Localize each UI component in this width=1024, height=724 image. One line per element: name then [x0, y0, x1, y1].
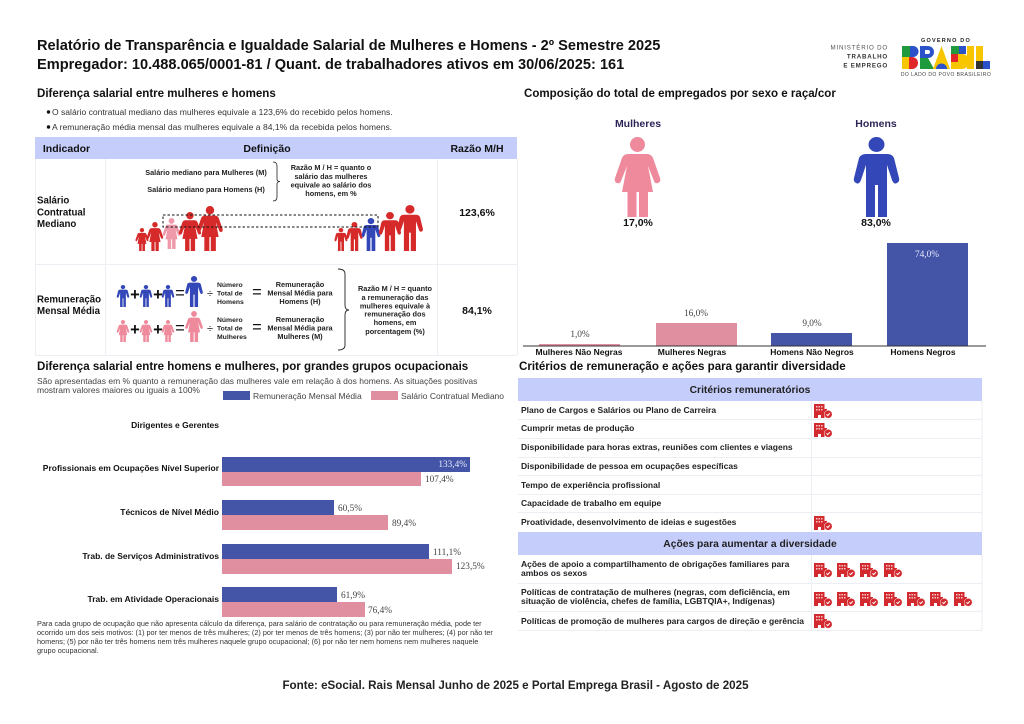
- title: [37, 38, 660, 73]
- definition: salário mediano labels: [145, 162, 280, 201]
- bar chart: composition: [523, 243, 986, 357]
- formula: men: [117, 276, 334, 307]
- panel: men total: 83,0%: [861, 217, 892, 229]
- bar chart: composition: 9,0%: [802, 319, 822, 329]
- bar chart: occupational groups: Profissionais em Ocupações Nível Superior: [43, 463, 220, 473]
- footnote: ocorrido um dos seis motivos: (1) por ter menos de três mulheres; (2) por ter menos de três homens; (3) por não ter mulheres; (4) por não ter: [37, 628, 493, 637]
- row label: salário contratual mediano: Contratual: [37, 208, 85, 218]
- bar chart: occupational groups: 123,5%: [456, 562, 485, 572]
- bar chart: occupational groups: Trab. em Atividade Operacionais: [88, 594, 219, 604]
- formula: women: Mulheres (M): [277, 332, 323, 341]
- criteria rows: Disponibilidade para horas extras, reuniões com clientes e viagens: [521, 442, 793, 452]
- bar chart: occupational groups: [43, 420, 485, 617]
- brace and razão text: Razão M / H = quanto: [358, 284, 433, 293]
- heading: diferença por grupos: Diferença salarial entre homens e mulheres, por grandes grupos ocupacionais: [37, 361, 468, 373]
- action rows: ambos os sexos: [521, 568, 587, 578]
- formula: men: Total de: [217, 290, 243, 298]
- formula: men: +: [153, 286, 163, 304]
- formula: women: =: [175, 320, 185, 338]
- footnote: Para cada grupo de ocupação que não apresenta cálculo da diferença, para salário de contratação ou para remuneração média, pode ter: [37, 619, 482, 628]
- formula: women: Total de: [217, 326, 243, 332]
- title: Empregador: 10.488.065/0001-81 / Quant. de trabalhadores ativos em 30/06/2025: 161: [37, 57, 624, 73]
- logo: ministério: E EMPREGO: [843, 62, 888, 70]
- bar chart: composition: 74,0%: [915, 250, 939, 260]
- formula: men: Homens (H): [279, 297, 321, 306]
- criteria rows: Capacidade de trabalho em equipe: [521, 498, 662, 508]
- legend: Remuneração Mensal Média: [253, 391, 362, 401]
- formula: women: Número: [217, 317, 243, 324]
- heading: diferença salarial: Diferença salarial entre mulheres e homens: [37, 88, 276, 100]
- definition: razão text: equivale ao salário dos: [291, 180, 371, 190]
- bar chart: occupational groups: Dirigentes e Gerentes: [131, 420, 219, 430]
- criteria rows: Cumprir metas de produção: [521, 423, 634, 433]
- legend: Salário Contratual Mediano: [401, 391, 504, 401]
- bar chart: composition: 1,0%: [570, 330, 590, 340]
- formula: women: Mensal Média para: [267, 324, 334, 332]
- header: ações: [518, 532, 982, 555]
- bar chart: occupational groups: 107,4%: [425, 475, 454, 485]
- formula: men: +: [130, 286, 140, 304]
- criteria rows: Proatividade, desenvolvimento de ideias e sugestões: [521, 517, 737, 527]
- action rows: Ações de apoio a compartilhamento de obrigações familiares para: [521, 559, 790, 569]
- logo: governo do brasil: GOVERNO DO: [921, 38, 971, 44]
- definition: salário mediano labels: Salário mediano para Homens (H): [147, 185, 265, 194]
- panel: critérios remuneratórios: [518, 378, 982, 532]
- criteria rows: Tempo de experiência profissional: [521, 480, 660, 490]
- brace and razão text: mulheres equivale à: [360, 302, 431, 310]
- row label: salário contratual mediano: Mediano: [37, 219, 76, 230]
- footnote: grupo ocupacional.: [37, 646, 99, 655]
- title: Relatório de Transparência e Igualdade Salarial de Mulheres e Homens - 2º Semestre 2025: [37, 38, 660, 54]
- panel: women total: Mulheres: [615, 118, 661, 130]
- definition: razão text: Razão M / H = quanto o: [291, 163, 372, 172]
- logo: governo do brasil: DO LADO DO POVO BRASILEIRO: [901, 72, 991, 78]
- logo: ministério: TRABALHO: [847, 54, 888, 60]
- source footer: Fonte: eSocial. Rais Mensal Junho de 2025 e Portal Emprega Brasil - Agosto de 2025: [282, 679, 749, 692]
- panel: men total: [854, 118, 899, 229]
- formula: women: Remuneração: [276, 315, 325, 324]
- heading: composição: Composição do total de empregados por sexo e raça/cor: [524, 88, 836, 100]
- bar chart: composition: Homens Não Negros: [770, 347, 854, 357]
- formula: men: ÷: [207, 288, 213, 300]
- icon: men median row: [334, 205, 423, 251]
- table header: Indicador: [43, 143, 90, 155]
- brace and razão text: [338, 269, 433, 350]
- bar chart: composition: Mulheres Negras: [658, 347, 727, 357]
- formula: women: [117, 311, 334, 342]
- formula: women: Mulheres: [217, 334, 247, 341]
- chart description: mostram valores maiores ou iguais a 100%: [37, 385, 200, 395]
- definition: razão text: [291, 163, 372, 198]
- criteria rows: Plano de Cargos e Salários ou Plano de Carreira: [521, 405, 716, 415]
- value: 123,6%: 123,6%: [459, 207, 495, 219]
- bar chart: composition: 16,0%: [684, 309, 708, 319]
- formula: women: =: [252, 318, 262, 336]
- bar chart: occupational groups: Trab. de Serviços Administrativos: [82, 551, 219, 561]
- icons: criteria: [814, 404, 832, 530]
- bullet texts: A remuneração média mensal das mulheres equivale a 84,1% da recebida pelos homens.: [52, 122, 392, 132]
- bullet texts: [47, 107, 393, 132]
- action rows: [521, 559, 804, 626]
- definition: razão text: salário das mulheres: [294, 172, 368, 181]
- bar chart: occupational groups: 76,4%: [368, 606, 392, 616]
- header: critérios: Critérios remuneratórios: [690, 385, 811, 396]
- legend: [223, 391, 504, 401]
- panel: indicator table: [35, 137, 518, 356]
- criteria rows: Disponibilidade de pessoa em ocupações específicas: [521, 461, 738, 471]
- row label: salário contratual mediano: Salário: [37, 196, 69, 206]
- action rows: Políticas de promoção de mulheres para cargos de direção e gerência: [521, 616, 804, 626]
- action rows: Políticas de contratação de mulheres (negras, com deficiência, em: [521, 587, 790, 597]
- definition: razão text: homens, em %: [305, 189, 357, 198]
- chart description: São apresentadas em % quanto a remuneração das mulheres vale em relação à dos homens. As situações positivas: [37, 376, 477, 386]
- table header: Definição: [243, 143, 291, 155]
- bar chart: occupational groups: 60,5%: [338, 504, 362, 514]
- bar chart: occupational groups: 61,9%: [341, 591, 365, 601]
- value: 84,1%: 84,1%: [462, 305, 493, 317]
- panel: women total: 17,0%: [623, 217, 654, 229]
- action rows: situação de violência, chefes de família, LGBTQIA+, Indígenas): [521, 596, 775, 606]
- bar chart: occupational groups: 111,1%: [433, 548, 461, 558]
- header: ações: Ações para aumentar a diversidade: [663, 539, 837, 550]
- bar chart: composition: Homens Negros: [890, 347, 956, 357]
- brace and razão text: homens, em: [374, 318, 417, 327]
- brace and razão text: a remuneração das: [362, 293, 428, 302]
- panel: men total: Homens: [855, 118, 897, 130]
- bar chart: composition: Mulheres Não Negras: [536, 347, 623, 357]
- row label: remuneração mensal média: Mensal Média: [37, 306, 101, 317]
- row label: remuneração mensal média: Remuneração: [37, 294, 101, 306]
- brace and razão text: porcentagem (%): [365, 327, 425, 336]
- logo: ministério: MINISTÉRIO DO: [830, 44, 888, 52]
- formula: women: ÷: [207, 323, 213, 335]
- icon: women median row: [135, 206, 223, 251]
- table header: Razão M/H: [450, 143, 504, 155]
- formula: women: +: [153, 321, 163, 339]
- bar chart: occupational groups: 89,4%: [392, 519, 416, 529]
- formula: men: =: [175, 284, 185, 302]
- criteria rows: [521, 405, 793, 527]
- logo: ministério: [830, 44, 888, 70]
- formula: men: Homens: [217, 299, 244, 306]
- panel: women total: [615, 118, 661, 229]
- formula: men: Mensal Média para: [267, 288, 334, 298]
- table header: [35, 137, 517, 159]
- formula: men: Número: [217, 282, 243, 289]
- formula: women: +: [130, 321, 140, 339]
- formula: men: Remuneração: [276, 280, 325, 289]
- heading: critérios: Critérios de remuneração e ações para garantir diversidade: [519, 361, 846, 373]
- panel: ações para diversidade: [518, 532, 982, 630]
- brace and razão text: remuneração dos: [364, 310, 426, 318]
- header: critérios: [518, 378, 982, 401]
- footnote: homens; (5) por não ter três homens nem três mulheres naquele grupo ocupacional; (6) por não ter nem homens nem mulheres naquele: [37, 637, 478, 646]
- bar chart: occupational groups: Técnicos de Nível Médio: [120, 507, 219, 517]
- logo: governo do brasil: [901, 38, 991, 78]
- definition: salário mediano labels: Salário mediano para Mulheres (M): [145, 168, 267, 177]
- icons: actions: [814, 563, 972, 628]
- formula: men: =: [252, 284, 262, 302]
- bullet texts: O salário contratual mediano das mulheres equivale a 123,6% do recebido pelos homens.: [52, 107, 393, 117]
- bar chart: occupational groups: 133,4%: [438, 460, 467, 470]
